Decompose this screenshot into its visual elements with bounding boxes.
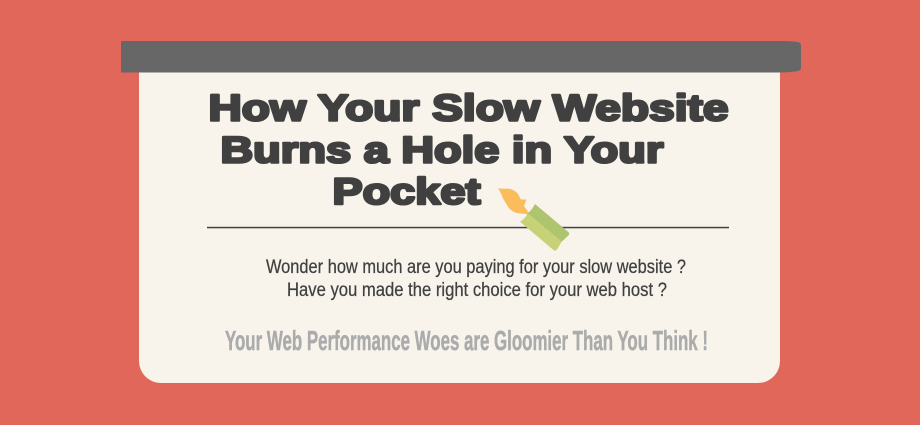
candle flame xyxy=(498,188,530,214)
title: How Your Slow Website xyxy=(208,88,728,128)
candle body light side xyxy=(520,213,562,251)
title xyxy=(208,88,728,212)
icon: burning candle xyxy=(498,188,569,251)
title: Burns a Hole in Your xyxy=(220,130,664,170)
intro text: Wonder how much are you paying for your slow website ? xyxy=(266,257,686,278)
title: Pocket xyxy=(332,171,480,212)
divider rule xyxy=(207,227,729,228)
panel: grey top bar xyxy=(121,41,801,72)
intro text: Have you made the right choice for your web host ? xyxy=(287,280,667,301)
intro text xyxy=(266,257,686,301)
candle body dark side xyxy=(528,204,569,242)
panel: paper card xyxy=(139,72,780,383)
